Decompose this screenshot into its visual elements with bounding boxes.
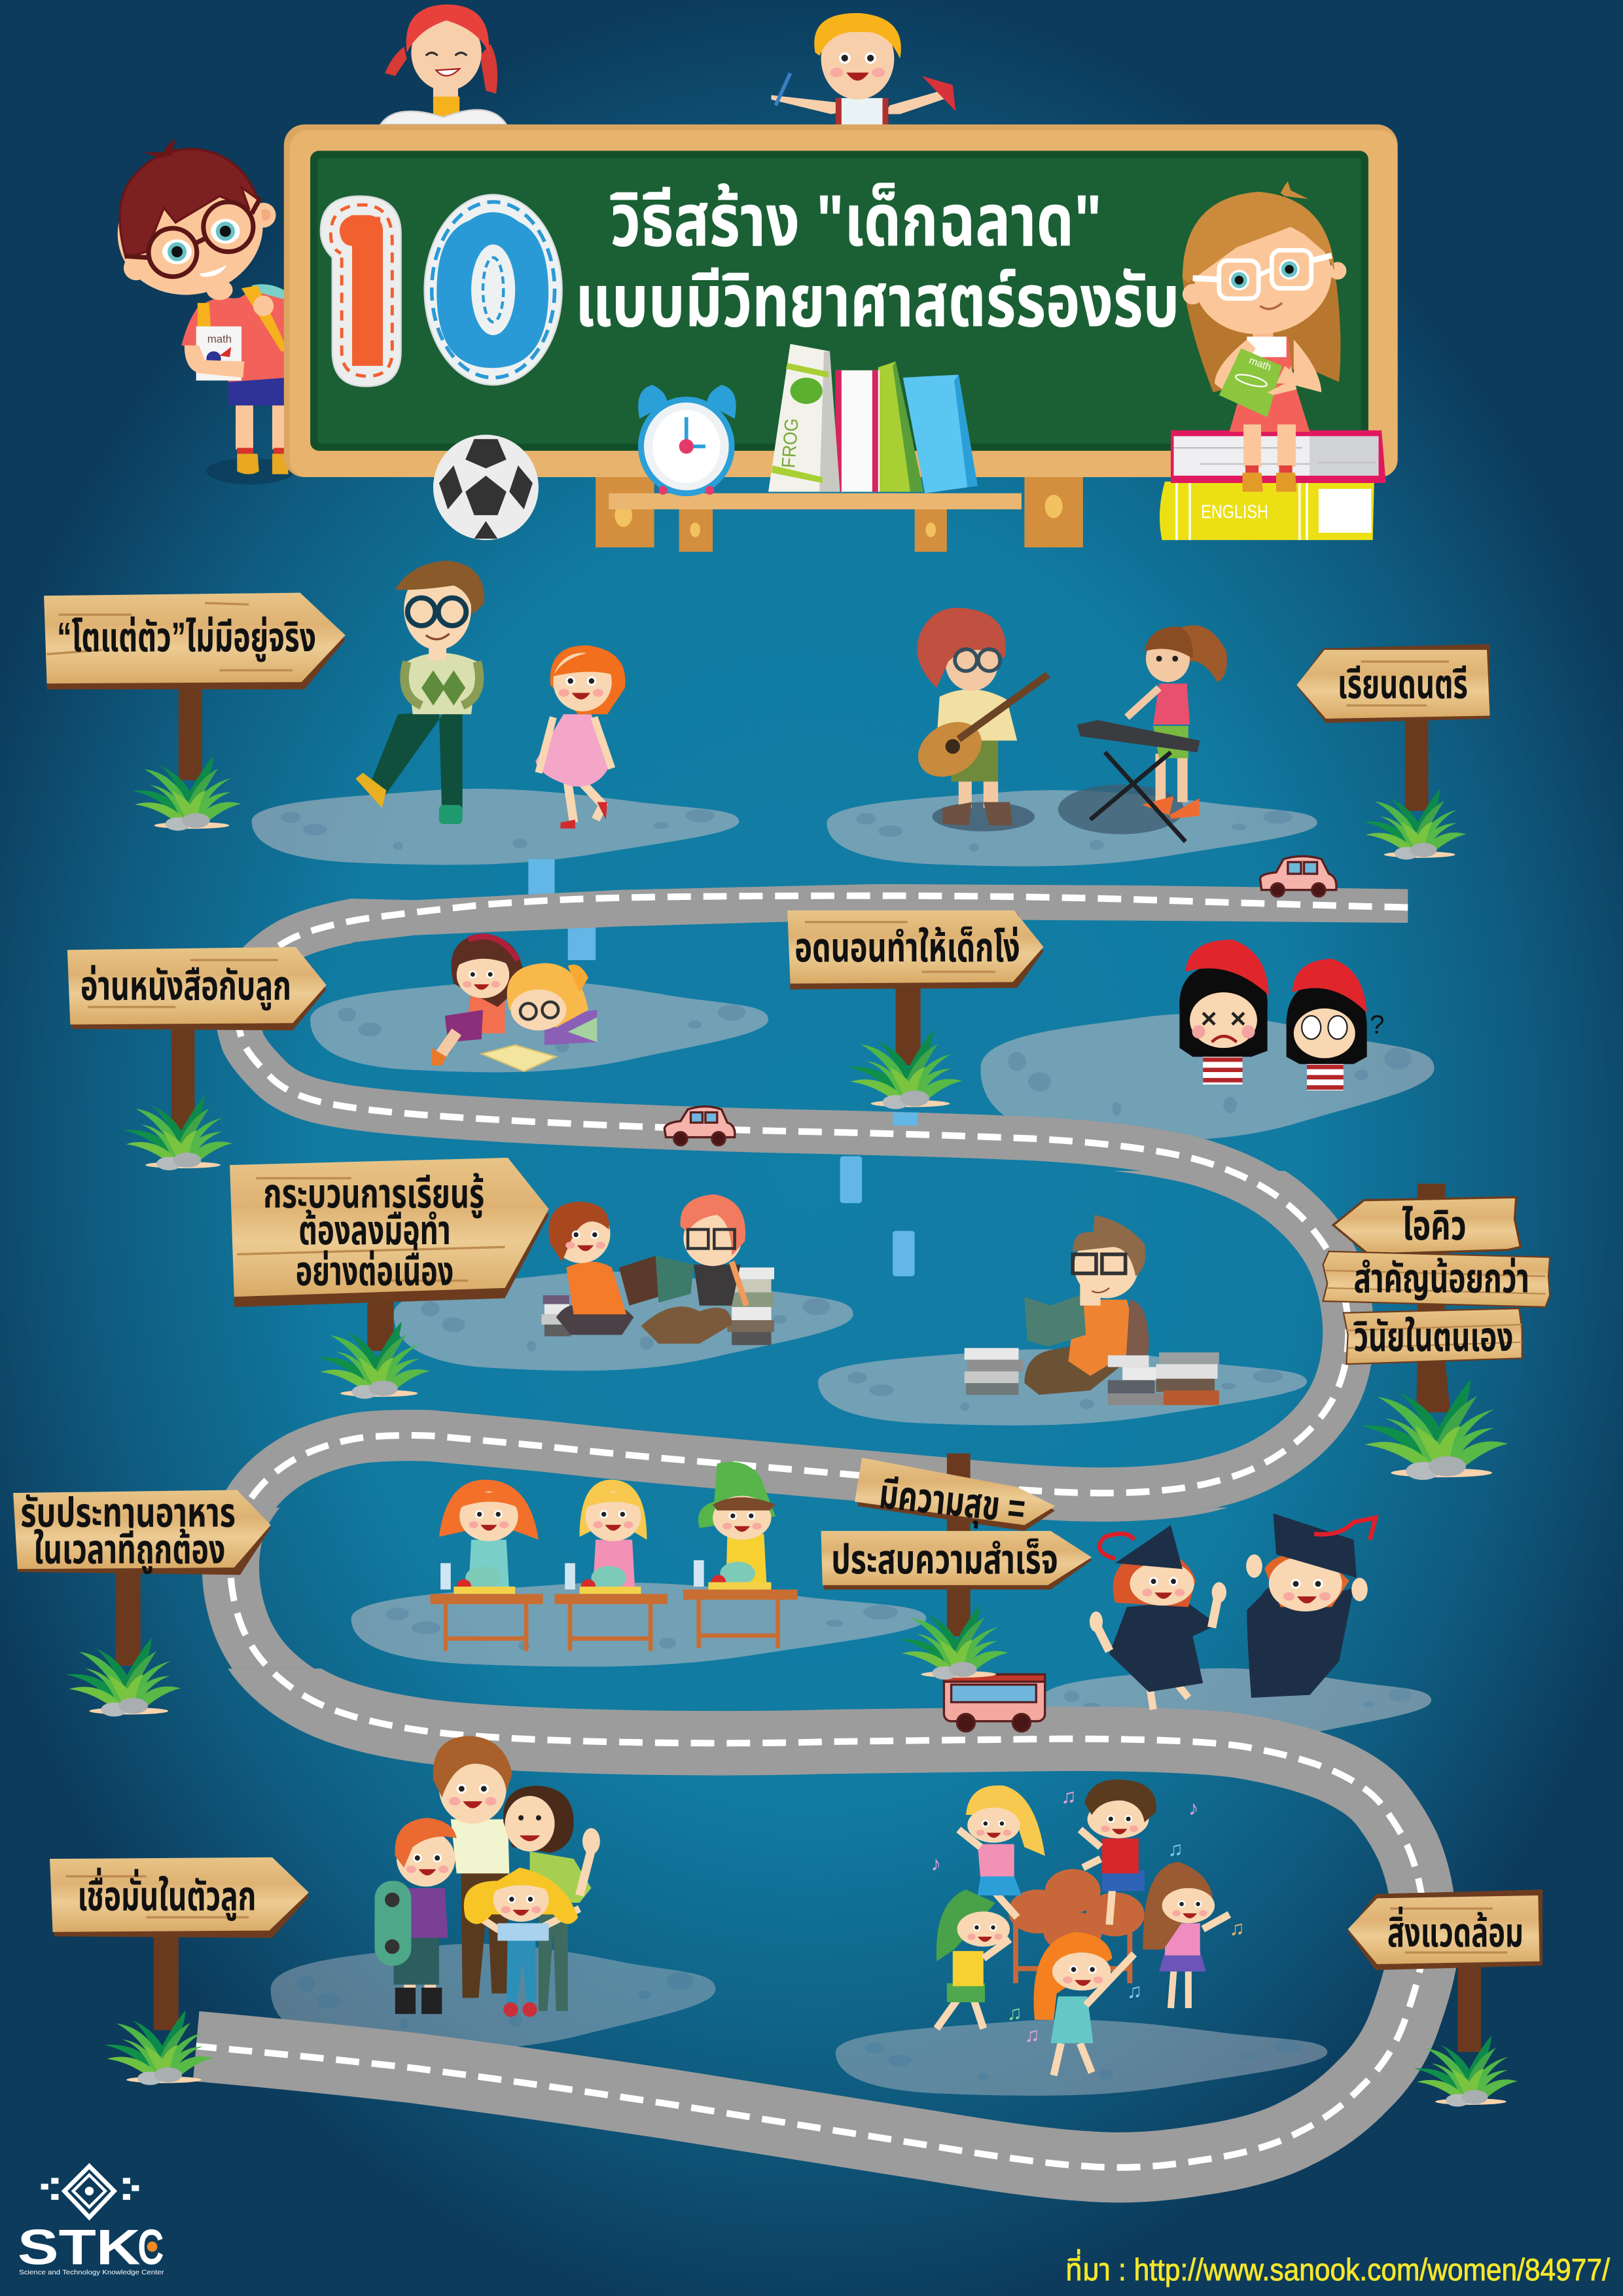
character: two boys with books bbox=[541, 1194, 774, 1345]
music notes: ♫ bbox=[1061, 1785, 1077, 1808]
icon: grass 6 bbox=[1361, 1379, 1508, 1480]
character: graduate two bbox=[1246, 1513, 1376, 1698]
character: confused girl: ? bbox=[1370, 1010, 1385, 1039]
character: reading girl top bbox=[380, 5, 507, 126]
sign: read with child: อ่านหนังสือกับลูก bbox=[80, 963, 291, 1011]
big number 10: 0 bbox=[427, 172, 558, 412]
math book: math bbox=[207, 332, 232, 345]
icon: grass 7 bbox=[66, 1638, 181, 1717]
sign: sleep deprivation: อดนอนทำให้เด็กโง่ bbox=[794, 925, 1020, 971]
icon: grass 4 bbox=[847, 1030, 962, 1109]
big number 10 bbox=[319, 194, 563, 387]
character: boy with glasses left bbox=[103, 139, 294, 484]
music notes: ♪ bbox=[1188, 1797, 1198, 1820]
sign: learn music: เรียนดนตรี bbox=[1338, 662, 1468, 708]
sign stack: IQ: สำคัญน้อยกว่า bbox=[1354, 1256, 1529, 1302]
road bbox=[196, 884, 1425, 2168]
dad bbox=[433, 1736, 512, 1998]
icon: grass 2 bbox=[1363, 789, 1467, 859]
books stack: ENGLISH bbox=[1201, 502, 1268, 523]
sign stack: IQ: วินัยในตนเอง bbox=[1353, 1314, 1513, 1360]
title bbox=[575, 180, 1179, 342]
kid three bbox=[694, 1462, 776, 1590]
icon: grass 8 bbox=[899, 1605, 1008, 1679]
green book bbox=[1219, 348, 1282, 417]
mom bbox=[503, 1785, 600, 2011]
math book bbox=[196, 327, 241, 380]
chalkboard bbox=[284, 124, 1398, 477]
character: graduate one bbox=[1090, 1525, 1226, 1710]
sign stack: IQ: ไอคิว bbox=[1402, 1203, 1467, 1249]
car top bbox=[1260, 856, 1336, 897]
sign: eat on time: รับประทานอาหาร bbox=[20, 1490, 236, 1535]
STKC logo: Science and Technology Knowledge Center bbox=[19, 2269, 164, 2276]
logo mark bbox=[41, 2166, 139, 2217]
green book: math bbox=[1247, 355, 1273, 373]
character: man reading on books bbox=[965, 1215, 1219, 1405]
character: confused girl bbox=[1287, 959, 1385, 1090]
sign: happiness: มีความสุข = bbox=[877, 1471, 1027, 1534]
blonde dancer bbox=[959, 1785, 1045, 1917]
STKC logo: STK bbox=[18, 2219, 141, 2275]
shelf bbox=[609, 493, 1022, 509]
music notes: ♪ bbox=[931, 1852, 941, 1875]
music notes: ♫ bbox=[1007, 2001, 1022, 2024]
character: girls reading bbox=[432, 934, 597, 1071]
bus bbox=[944, 1674, 1045, 1731]
icon: standing books: FROG bbox=[778, 418, 803, 469]
character: girl at keyboard bbox=[1058, 625, 1227, 842]
sign: learning process: อย่างต่อเนื่อง bbox=[296, 1242, 454, 1294]
character: girl in pink dress bbox=[535, 645, 626, 829]
icon: standing books bbox=[768, 344, 978, 493]
car middle bbox=[664, 1107, 735, 1145]
character: man in argyle sweater bbox=[355, 560, 484, 824]
hair back bbox=[1183, 249, 1340, 392]
icon: alarm clock bbox=[638, 385, 736, 495]
icon: soccer ball bbox=[433, 435, 539, 540]
open book bbox=[380, 110, 507, 124]
character: kids dancing with chairs bbox=[931, 1780, 1245, 2075]
light blue dash over road bbox=[893, 1113, 918, 1126]
music notes: ♫ bbox=[1229, 1916, 1245, 1939]
boy with skateboard bbox=[374, 1818, 457, 2014]
music notes bbox=[931, 1785, 1245, 2047]
sign: environment: สิ่งแวดล้อม bbox=[1387, 1907, 1524, 1956]
kid one bbox=[439, 1480, 539, 1594]
icon: grass 3 bbox=[123, 1096, 232, 1170]
sign: happiness: ประสบความสำเร็จ bbox=[831, 1537, 1058, 1583]
sign: eat on time bbox=[13, 1490, 271, 1666]
ground blobs bbox=[252, 789, 1435, 2096]
sign: learning process bbox=[230, 1158, 549, 1351]
icon: grass 5 bbox=[317, 1321, 430, 1399]
character: family bbox=[374, 1736, 600, 2017]
icon: grass 10 bbox=[1414, 2036, 1518, 2107]
sign: learning process: ต้องลงมือทำ bbox=[298, 1208, 451, 1253]
icon: grass 1 bbox=[132, 756, 241, 831]
board legs bbox=[596, 469, 1083, 552]
sign: learning process: กระบวนการเรียนรู้ bbox=[264, 1171, 484, 1219]
character: boy with guitar bbox=[908, 608, 1048, 831]
character: kids at desks bbox=[430, 1462, 798, 1651]
stools bbox=[1008, 1869, 1145, 1983]
music notes: ♫ bbox=[1024, 2024, 1040, 2047]
sign: grown-ups do not exist: “โตแต่ตัว”ไม่มีอยู่จริง bbox=[57, 615, 316, 662]
character: boy with pencil top bbox=[772, 13, 955, 126]
big number 10: 1 bbox=[300, 170, 421, 412]
title: วิธีสร้าง "เด็กฉลาด" bbox=[610, 180, 1102, 262]
sign: confidence bbox=[50, 1857, 309, 2030]
sign stack: IQ bbox=[1323, 1183, 1550, 1412]
music notes: ♫ bbox=[1168, 1838, 1183, 1861]
title: แบบมีวิทยาศาสตร์รองรับ bbox=[575, 260, 1179, 342]
sign: environment bbox=[1348, 1890, 1543, 2052]
sign: happiness bbox=[821, 1454, 1092, 1636]
light blue dashes bbox=[528, 859, 915, 1276]
long-haired dancer bbox=[1143, 1862, 1229, 2008]
boy with green cap bbox=[936, 1890, 1010, 2028]
sign: confidence: เชื่อมั่นในตัวลูก bbox=[78, 1867, 256, 1921]
kid two bbox=[565, 1480, 647, 1594]
music notes: ♫ bbox=[1127, 1979, 1142, 2002]
STKC logo bbox=[18, 2166, 164, 2276]
boy dancer bbox=[1080, 1780, 1156, 1925]
sign: read with child bbox=[67, 947, 327, 1132]
blonde girl bbox=[464, 1867, 580, 2017]
sign: grown-ups do not exist bbox=[44, 593, 346, 780]
character: sleepy girl bbox=[1179, 940, 1269, 1085]
sign: sleep deprivation bbox=[787, 910, 1043, 1066]
orange-haired dancer bbox=[1034, 1932, 1134, 2075]
books stack bbox=[1160, 430, 1386, 540]
STKC logo: C bbox=[137, 2219, 164, 2275]
icon: grass 9 bbox=[104, 2010, 213, 2085]
sign: learn music bbox=[1296, 644, 1490, 811]
sign: eat on time: ในเวลาที่ถูกต้อง bbox=[33, 1520, 225, 1574]
character: girl on books bbox=[1160, 181, 1386, 540]
